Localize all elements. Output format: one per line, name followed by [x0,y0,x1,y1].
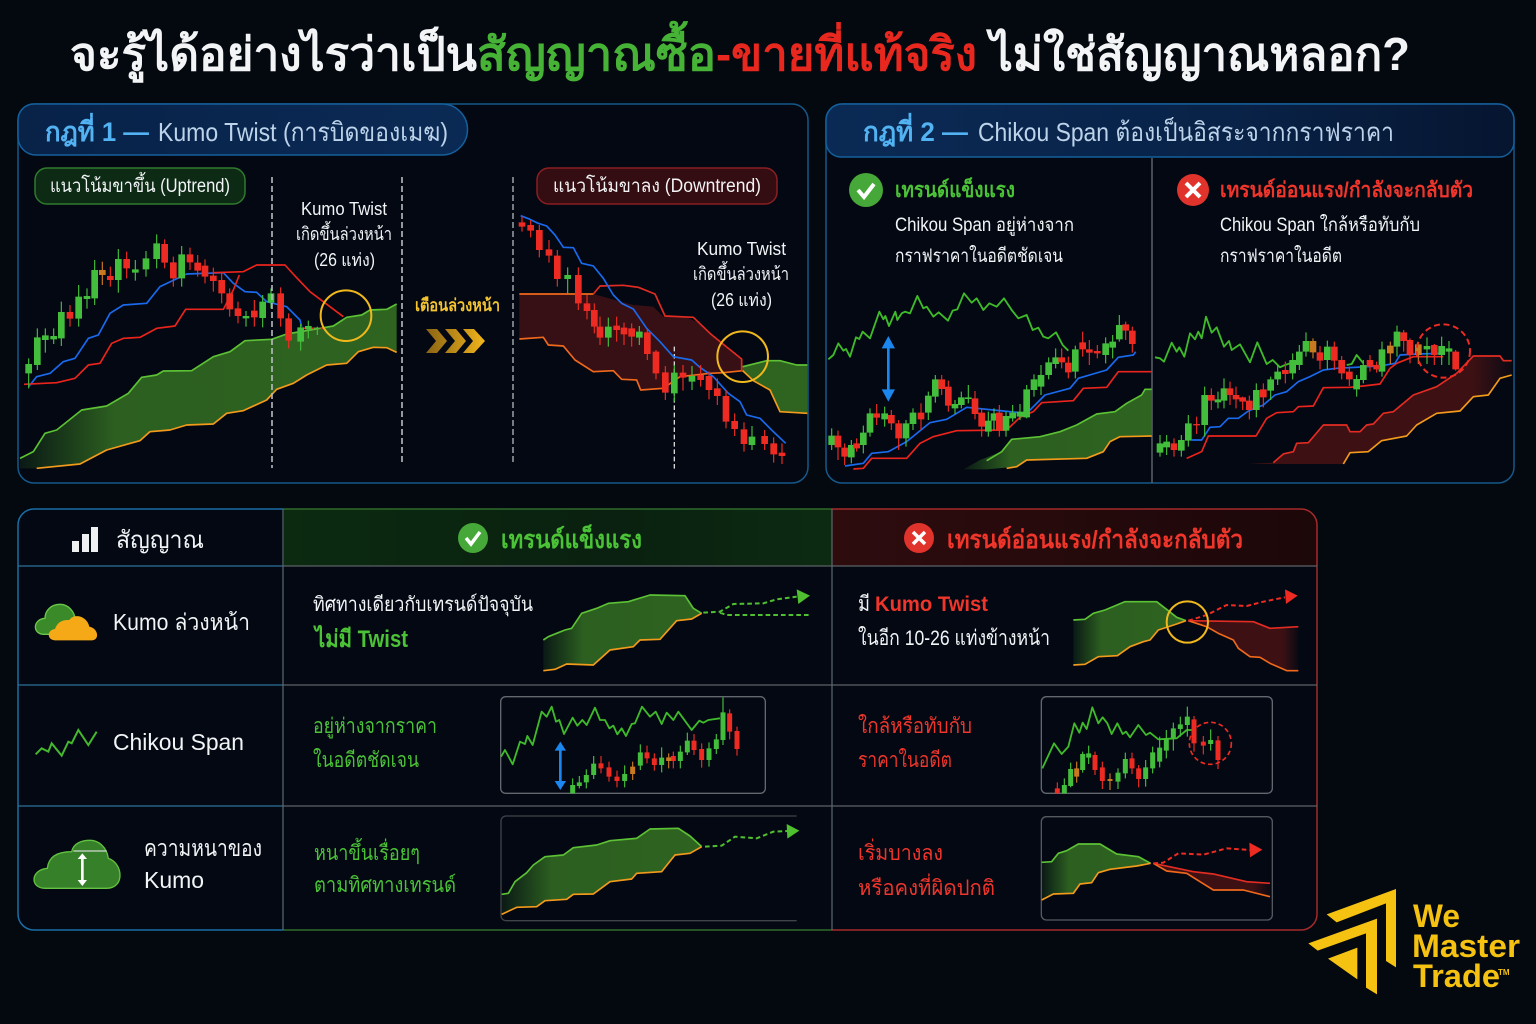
uptrend twist note: Kumo Twist [301,199,387,219]
strong trend note [849,173,1074,267]
uptrend chart [20,234,397,468]
header: signal [72,527,204,554]
weak trend note [1177,174,1473,267]
downtrend label [537,168,777,204]
title: -ขายที่แท้จริง [716,22,977,80]
uptrend cloud [20,304,397,468]
mini chart: chikou overlapping price [1041,697,1272,793]
row label: Kumo leading [35,604,250,640]
row label: Chikou Span: Chikou Span [113,729,244,755]
uptrend twist note: (26 แท่ง) [314,250,375,270]
table body and borders [18,509,1317,930]
strong: chikou text [313,715,437,772]
row label: Chikou Span [36,729,244,756]
early warning arrow [415,295,500,353]
comparison table [18,509,1317,930]
icon: green and orange clouds [35,604,97,640]
chikou line [1155,317,1363,367]
mini cloud: thinning [1041,817,1272,920]
title: จะรู้ได้อย่างไรว่าเป็น [70,26,478,83]
weak trend note: เทรนด์อ่อนแรง/กำลังจะกลับตัว [1220,178,1473,202]
uptrend twist note: เกิดขึ้นล่วงหน้า [296,221,392,244]
logo wordmark: Master [1412,928,1520,964]
logo wordmark [1412,898,1520,994]
uptrend label [35,168,245,204]
early warning arrow: เตือนล่วงหน้า [415,295,500,315]
strong trend note: กราฟราคาในอดีตชัดเจน [895,245,1063,267]
weak: chikou text: ราคาในอดีต [858,748,952,772]
downtrend label: แนวโน้มขาลง (Downtrend) [553,174,761,197]
header: weak trend: เทรนด์อ่อนแรง/กำลังจะกลับตัว [947,525,1243,554]
weak: chikou text: ใกล้หรือทับกับ [858,714,972,738]
rule 1 header: กฎที่ 1 — [45,112,149,147]
panel: rule 2 Chikou Span [826,104,1514,483]
rule 2 header: กฎที่ 2 — [863,112,968,147]
icon: distance arrow [882,336,895,402]
strong: kumo leading text: ไม่มี Twist [312,624,408,653]
row label: Kumo thickness: Kumo [144,867,204,893]
strong trend chart [828,293,1152,469]
strong: kumo leading text [312,593,533,653]
dashed markers [272,177,402,468]
header: strong trend [458,523,642,554]
logo: We Master Trade [1308,889,1520,994]
strong trend note: เทรนด์แข็งแรง [895,176,1015,202]
downtrend twist note: เกิดขึ้นล่วงหน้า [693,261,789,284]
mini cloud: steady thickening [501,816,799,921]
row label: Kumo thickness [34,835,262,893]
row label: Kumo thickness: ความหนาของ [144,835,262,861]
strong: chikou text: อยู่ห่างจากราคา [313,715,437,739]
weak: kumo twist text: มี [858,593,870,616]
weak: kumo twist text [858,593,1050,650]
rule 1 header: Kumo Twist (การบิดของเมฆ) [158,117,448,147]
downtrend twist note [693,239,789,310]
strong: thickness text [314,838,456,897]
mini charts: weak column [1041,589,1298,920]
weak trend note: Chikou Span ใกล้หรือทับกับ [1220,214,1420,236]
panel: rule 1 Kumo Twist [18,104,808,483]
column divider [1151,158,1153,483]
mini chart: chikou far from price [501,697,765,793]
mini charts: strong column [501,589,810,921]
mini cloud: no twist [543,589,810,671]
uptrend twist note [296,199,392,270]
downtrend twist note: Kumo Twist [697,239,786,259]
rule 2 header [826,104,1514,157]
downtrend cloud [519,285,807,413]
title [70,20,1410,83]
strong: thickness text: หนาขึ้นเรื่อยๆ [314,838,420,865]
weak: thickness text: เริ่มบางลง [858,838,943,865]
weak: chikou text [858,714,972,772]
downtrend chart [519,216,807,470]
rule 2 header: Chikou Span ต้องเป็นอิสระจากกราฟราคา [978,116,1394,147]
icon: cloud with thickness arrow [34,840,120,888]
row label: Kumo leading: Kumo ล่วงหน้า [113,609,250,635]
rule 1 header [18,104,468,155]
title: ไม่ใช่สัญญาณหลอก? [985,27,1410,81]
logo wordmark: Trade [1413,958,1500,994]
strong: kumo leading text: ทิศทางเดียวกับเทรนด์ปัจจุบัน [313,593,533,617]
logo wordmark: TM [1498,968,1510,977]
icon: chikou line [36,730,97,756]
logo mark [1308,889,1396,994]
weak: kumo twist text: ในอีก 10-26 แท่งข้างหน้า [858,626,1050,650]
header: strong trend: เทรนด์แข็งแรง [501,524,642,554]
downtrend twist note: (26 แท่ง) [711,290,772,310]
weak trend note: กราฟราคาในอดีต [1220,245,1342,267]
uptrend label: แนวโน้มขาขึ้น (Uptrend) [50,172,230,197]
weak trend chart [1155,317,1512,464]
chikou line [828,293,1068,359]
weak: kumo twist text: Kumo Twist [875,593,988,616]
logo wordmark: We [1413,898,1460,934]
title: สัญญาณซื้อ [477,20,716,81]
mini cloud: twist ahead [1073,589,1298,671]
weak: thickness text: หรือคงที่ผิดปกติ [858,873,995,900]
twist highlight circle [717,331,768,382]
strong trend note: Chikou Span อยู่ห่างจาก [895,215,1074,236]
strong: thickness text: ตามทิศทางเทรนด์ [314,873,456,897]
twist highlight circle [321,290,371,341]
header: signal: สัญญาณ [116,527,204,554]
weak: thickness text [858,838,995,900]
dashed highlight circle [1417,324,1470,378]
divider [512,177,514,465]
strong: chikou text: ในอดีตชัดเจน [313,748,419,772]
